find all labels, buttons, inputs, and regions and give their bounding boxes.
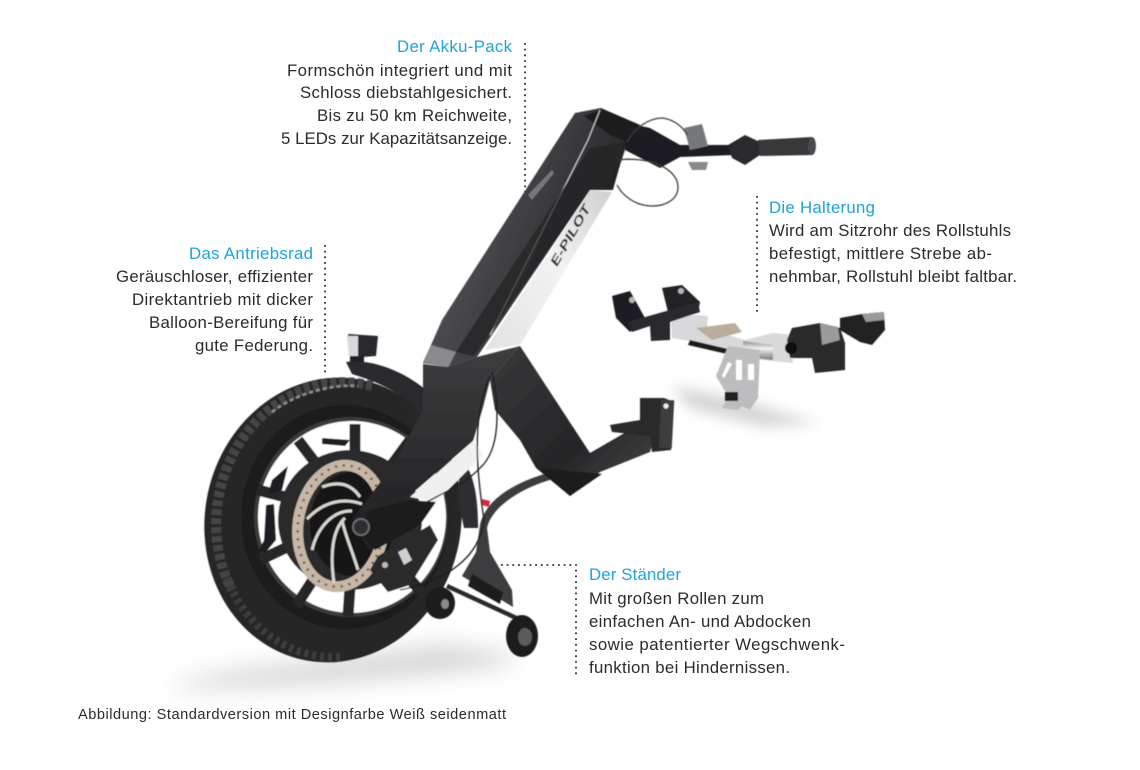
lower arm xyxy=(490,346,674,496)
brake disc xyxy=(290,460,392,592)
rim xyxy=(254,417,448,617)
grip xyxy=(758,137,815,156)
tire xyxy=(178,354,488,686)
callout: Das Antriebsrad: Geräuschloser, effizienter xyxy=(116,267,313,286)
callout: Der Ständer: einfachen An- und Abdocken xyxy=(589,612,811,631)
brake cables xyxy=(385,372,497,590)
callout: Die Halterung: Die Halterung xyxy=(769,198,875,217)
red reflector xyxy=(482,499,490,507)
shadow under wheel xyxy=(165,645,520,688)
badge xyxy=(528,170,554,200)
main tube xyxy=(423,108,640,368)
cable loops xyxy=(617,118,687,206)
caster left xyxy=(425,587,455,619)
main tube: E-PILOT xyxy=(547,201,595,268)
left clamps xyxy=(612,291,645,332)
callout: Der Ständer: funktion bei Hindernissen. xyxy=(589,658,790,677)
arm end mount xyxy=(610,398,674,452)
white panel with logo xyxy=(485,190,612,350)
mounting bracket xyxy=(612,285,885,410)
callout: Die Halterung: Wird am Sitzrohr des Rollstuhls xyxy=(769,221,1011,240)
callout: Das Antriebsrad: Balloon-Bereifung für xyxy=(149,313,313,332)
product: E-Pilot handbike attachment xyxy=(178,108,885,686)
headlight xyxy=(347,334,378,364)
front wheel xyxy=(178,354,488,686)
callout: Das Antriebsrad: Das Antriebsrad xyxy=(189,244,313,263)
rear fender guard xyxy=(458,457,478,528)
caption: Abbildung: Standardversion mit Designfarbe Weiß seidenmatt xyxy=(78,707,506,723)
callout: Die Halterung: befestigt, mittlere Strebe ab- xyxy=(769,244,992,263)
callout: Der Ständer: Der Ständer xyxy=(589,565,681,584)
callout: Die Halterung: nehmbar, Rollstuhl bleibt faltbar. xyxy=(769,267,1017,286)
callout: Das Antriebsrad: gute Federung. xyxy=(195,336,313,355)
callout: Die Halterung xyxy=(757,196,1017,315)
silver band xyxy=(423,345,456,368)
callout: Der Akku-Pack xyxy=(281,37,525,192)
brake lever xyxy=(728,135,760,165)
callout: Der Ständer xyxy=(501,565,845,677)
handlebar xyxy=(617,118,816,206)
callout: Das Antriebsrad: Direktantrieb mit dicker xyxy=(132,290,313,309)
stand xyxy=(425,457,550,657)
motor axle xyxy=(353,519,369,535)
caster right xyxy=(506,615,538,657)
callout: Der Akku-Pack: Schloss diebstahlgesichert. xyxy=(300,83,512,102)
callout: Der Ständer: Mit großen Rollen zum xyxy=(589,589,764,608)
steel tube and plate xyxy=(670,313,793,363)
shadow under mount xyxy=(672,386,820,426)
fork and joint xyxy=(352,346,520,592)
callout: Der Ständer: sowie patentierter Wegschwenk- xyxy=(589,635,845,654)
mudguard xyxy=(346,361,432,416)
spokes xyxy=(258,424,428,616)
callout: Das Antriebsrad xyxy=(116,244,325,375)
hub xyxy=(278,450,422,590)
callout: Der Akku-Pack: Der Akku-Pack xyxy=(397,37,513,56)
callout: Der Akku-Pack: Formschön integriert und mit xyxy=(287,61,512,80)
display xyxy=(684,124,708,150)
right clamps xyxy=(787,323,845,373)
brake caliper xyxy=(370,525,438,592)
callout: Der Akku-Pack: 5 LEDs zur Kapazitätsanzeige. xyxy=(281,129,512,148)
callout: Der Akku-Pack: Bis zu 50 km Reichweite, xyxy=(317,106,512,125)
